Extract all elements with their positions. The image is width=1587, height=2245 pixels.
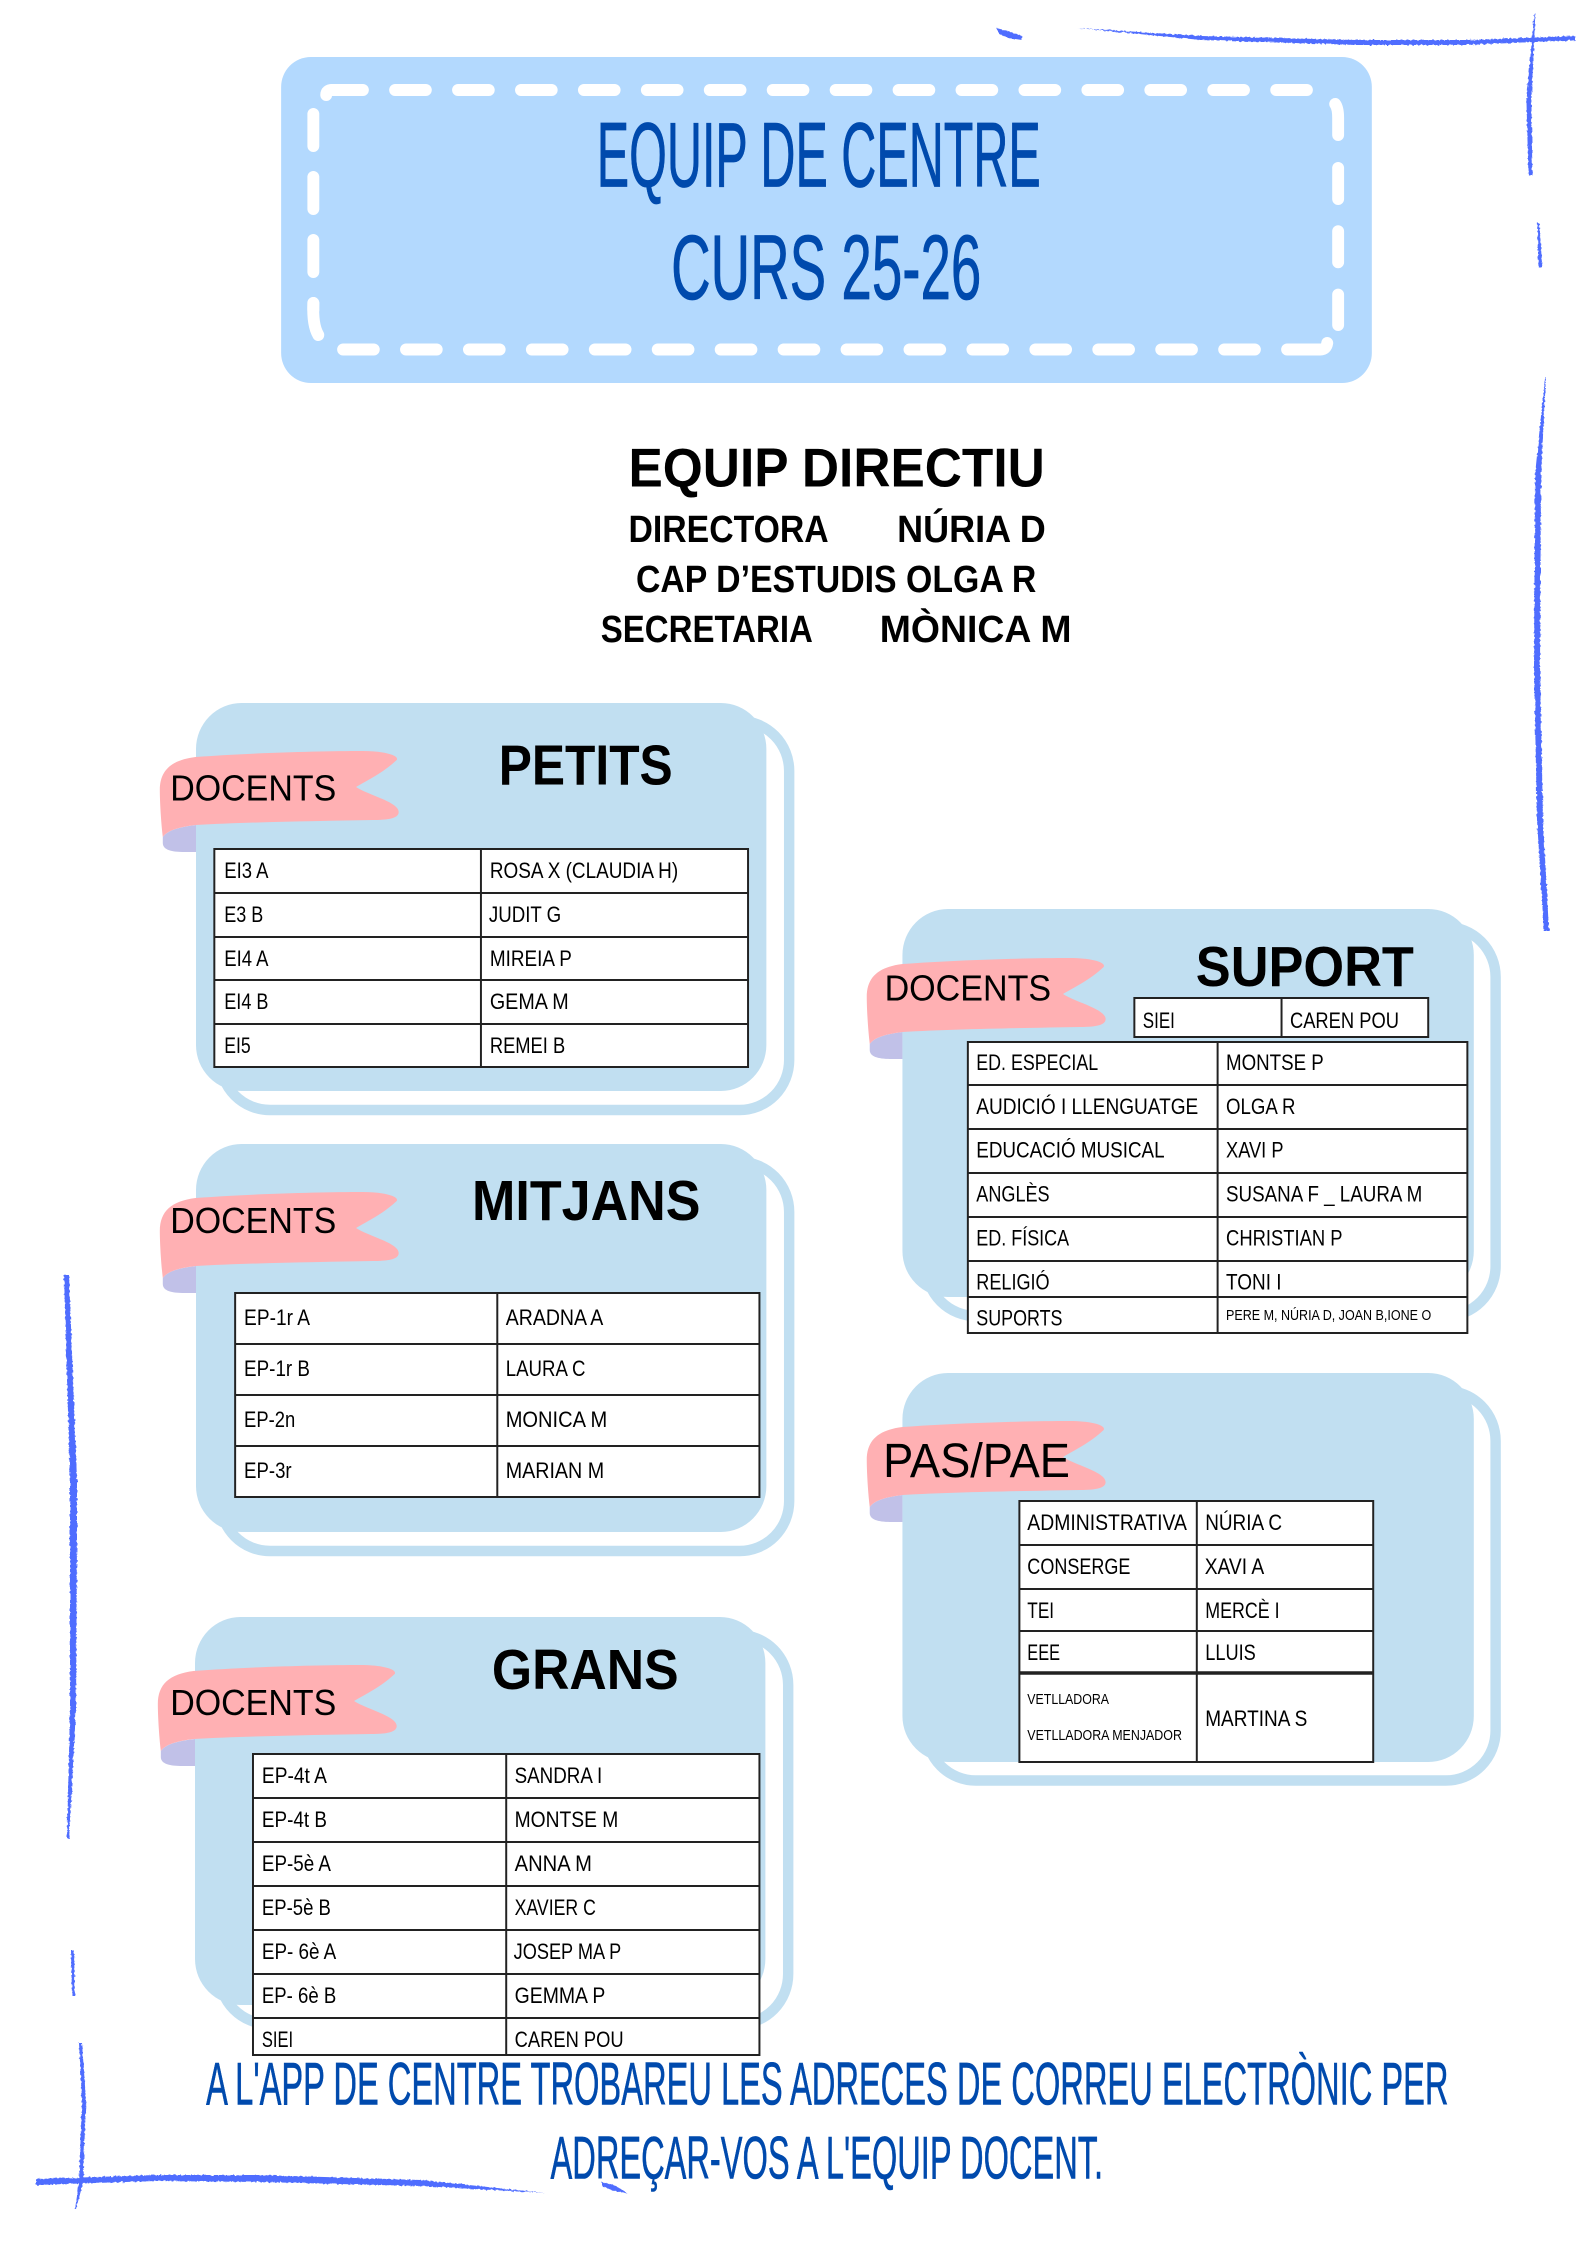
table: mitjans: ARADNA A xyxy=(506,1305,604,1330)
ribbon: docents: DOCENTS xyxy=(170,1682,336,1723)
table: mitjans: EP-1r A xyxy=(244,1305,310,1330)
management team: EQUIP DIRECTIU xyxy=(629,436,1045,499)
table: petits: REMEI B xyxy=(490,1033,565,1058)
ribbon: docents: DOCENTS xyxy=(170,1200,336,1241)
table: grans: CAREN POU xyxy=(515,2027,624,2052)
table: grans: ANNA M xyxy=(515,1851,592,1876)
heading: mitjans: MITJANS xyxy=(472,1170,700,1233)
heading: petits: PETITS xyxy=(499,734,673,798)
panel: petits xyxy=(160,703,789,1110)
table: grans: JOSEP MA P xyxy=(514,1939,621,1964)
table: pas/pae xyxy=(1019,1501,1373,1762)
title banner xyxy=(281,57,1372,383)
management team: SECRETARIA xyxy=(601,609,813,651)
table: petits: EI5 xyxy=(224,1033,251,1058)
footer note xyxy=(206,2050,1448,2192)
sketched frame: bottom left corner xyxy=(36,1275,627,2209)
table: grans: EP-4t A xyxy=(262,1763,327,1788)
table: pas/pae: EEE xyxy=(1027,1640,1060,1665)
management team: NÚRIA D xyxy=(897,508,1046,551)
table: mitjans: EP-3r xyxy=(244,1458,292,1483)
table: mitjans: MARIAN M xyxy=(506,1458,604,1483)
table: petits: MIREIA P xyxy=(490,946,572,971)
table: pas/pae: MERCÈ I xyxy=(1205,1598,1280,1623)
sketched frame: top right corner xyxy=(996,13,1575,931)
ribbon: docents: DOCENTS xyxy=(170,767,336,809)
table: siei: SIEI xyxy=(1143,1008,1175,1033)
table: petits: GEMA M xyxy=(490,989,569,1014)
table: mitjans: LAURA C xyxy=(506,1356,585,1381)
management team: MÒNICA M xyxy=(880,608,1072,651)
table: siei xyxy=(1134,998,1428,1037)
table: pas/pae: VETLLADORA MENJADOR xyxy=(1027,1727,1182,1744)
table: suport: SUSANA F _ LAURA M xyxy=(1226,1182,1422,1207)
table: suport: MONTSE P xyxy=(1226,1050,1324,1075)
table: suport: EDUCACIÓ MUSICAL xyxy=(976,1138,1165,1163)
table: pas/pae: VETLLADORA xyxy=(1027,1691,1109,1708)
table: grans: SANDRA I xyxy=(515,1763,602,1788)
ribbon: docents xyxy=(867,958,1106,1059)
table: mitjans: EP-2n xyxy=(244,1407,295,1432)
ribbon: docents: DOCENTS xyxy=(885,967,1051,1009)
table: suport: AUDICIÓ I LLENGUATGE xyxy=(976,1094,1198,1119)
table: pas/pae: NÚRIA C xyxy=(1205,1510,1282,1535)
table: suport: PERE M, NÚRIA D, JOAN B,IONE O xyxy=(1226,1307,1431,1324)
table: grans: GEMMA P xyxy=(515,1983,605,2008)
footer note: ADREÇAR-VOS A L'EQUIP DOCENT. xyxy=(551,2124,1103,2192)
management team xyxy=(601,436,1072,651)
heading: grans: GRANS xyxy=(492,1639,679,1702)
table: pas/pae: CONSERGE xyxy=(1027,1554,1130,1579)
table: grans: EP- 6è A xyxy=(262,1939,337,1964)
ribbon: docents xyxy=(158,1665,397,1766)
table: grans: XAVIER C xyxy=(515,1895,596,1920)
table: suport: CHRISTIAN P xyxy=(1226,1226,1343,1251)
ribbon: docents xyxy=(160,751,399,852)
table: grans: EP-5è A xyxy=(262,1851,331,1876)
table: mitjans: MONICA M xyxy=(506,1407,607,1432)
title text xyxy=(597,104,1041,319)
table: petits: EI4 A xyxy=(224,946,269,971)
heading: suport: SUPORT xyxy=(1196,936,1414,999)
table: mitjans xyxy=(235,1293,759,1497)
table: suport: ED. FÍSICA xyxy=(976,1226,1069,1251)
table: suport: TONI I xyxy=(1226,1270,1282,1295)
table: petits xyxy=(214,849,748,1067)
table: suport xyxy=(968,1042,1467,1333)
management team: CAP D’ESTUDIS OLGA R xyxy=(636,559,1036,601)
table: suport: OLGA R xyxy=(1226,1094,1295,1119)
title text: EQUIP DE CENTRE xyxy=(597,104,1041,207)
table: grans: EP-4t B xyxy=(262,1807,327,1832)
table: pas/pae: TEI xyxy=(1027,1598,1054,1623)
title text: CURS 25-26 xyxy=(671,217,981,319)
ribbon: pas/pae: PAS/PAE xyxy=(883,1435,1070,1488)
table: grans xyxy=(253,1754,759,2055)
panel: pas/pae xyxy=(867,1373,1496,1780)
table: suport: ANGLÈS xyxy=(976,1182,1050,1207)
table: pas/pae: ADMINISTRATIVA xyxy=(1027,1510,1187,1535)
panel: mitjans xyxy=(160,1144,789,1551)
table: suport: ED. ESPECIAL xyxy=(976,1050,1098,1075)
ribbon: docents xyxy=(160,1192,399,1293)
table: pas/pae: LLUIS xyxy=(1205,1640,1256,1665)
table: suport: SUPORTS xyxy=(976,1306,1063,1331)
table: petits: E3 B xyxy=(224,902,263,927)
panel: grans xyxy=(158,1617,788,2055)
table: pas/pae: XAVI A xyxy=(1205,1554,1265,1579)
table: grans: EP-5è B xyxy=(262,1895,331,1920)
table: petits: EI4 B xyxy=(224,989,268,1014)
ribbon: pas/pae xyxy=(867,1421,1106,1522)
table: suport: RELIGIÓ xyxy=(976,1270,1050,1295)
management team: DIRECTORA xyxy=(629,509,829,551)
table: mitjans: EP-1r B xyxy=(244,1356,310,1381)
table: grans: MONTSE M xyxy=(515,1807,618,1832)
table: grans: EP- 6è B xyxy=(262,1983,336,2008)
table: pas/pae: MARTINA S xyxy=(1205,1706,1307,1731)
table: grans: SIEI xyxy=(262,2027,293,2052)
panel: suport xyxy=(867,909,1496,1333)
table: suport: XAVI P xyxy=(1226,1138,1284,1163)
table: petits: EI3 A xyxy=(224,858,269,883)
table: siei: CAREN POU xyxy=(1290,1008,1399,1033)
table: petits: JUDIT G xyxy=(489,902,561,927)
table: petits: ROSA X (CLAUDIA H) xyxy=(490,858,678,883)
